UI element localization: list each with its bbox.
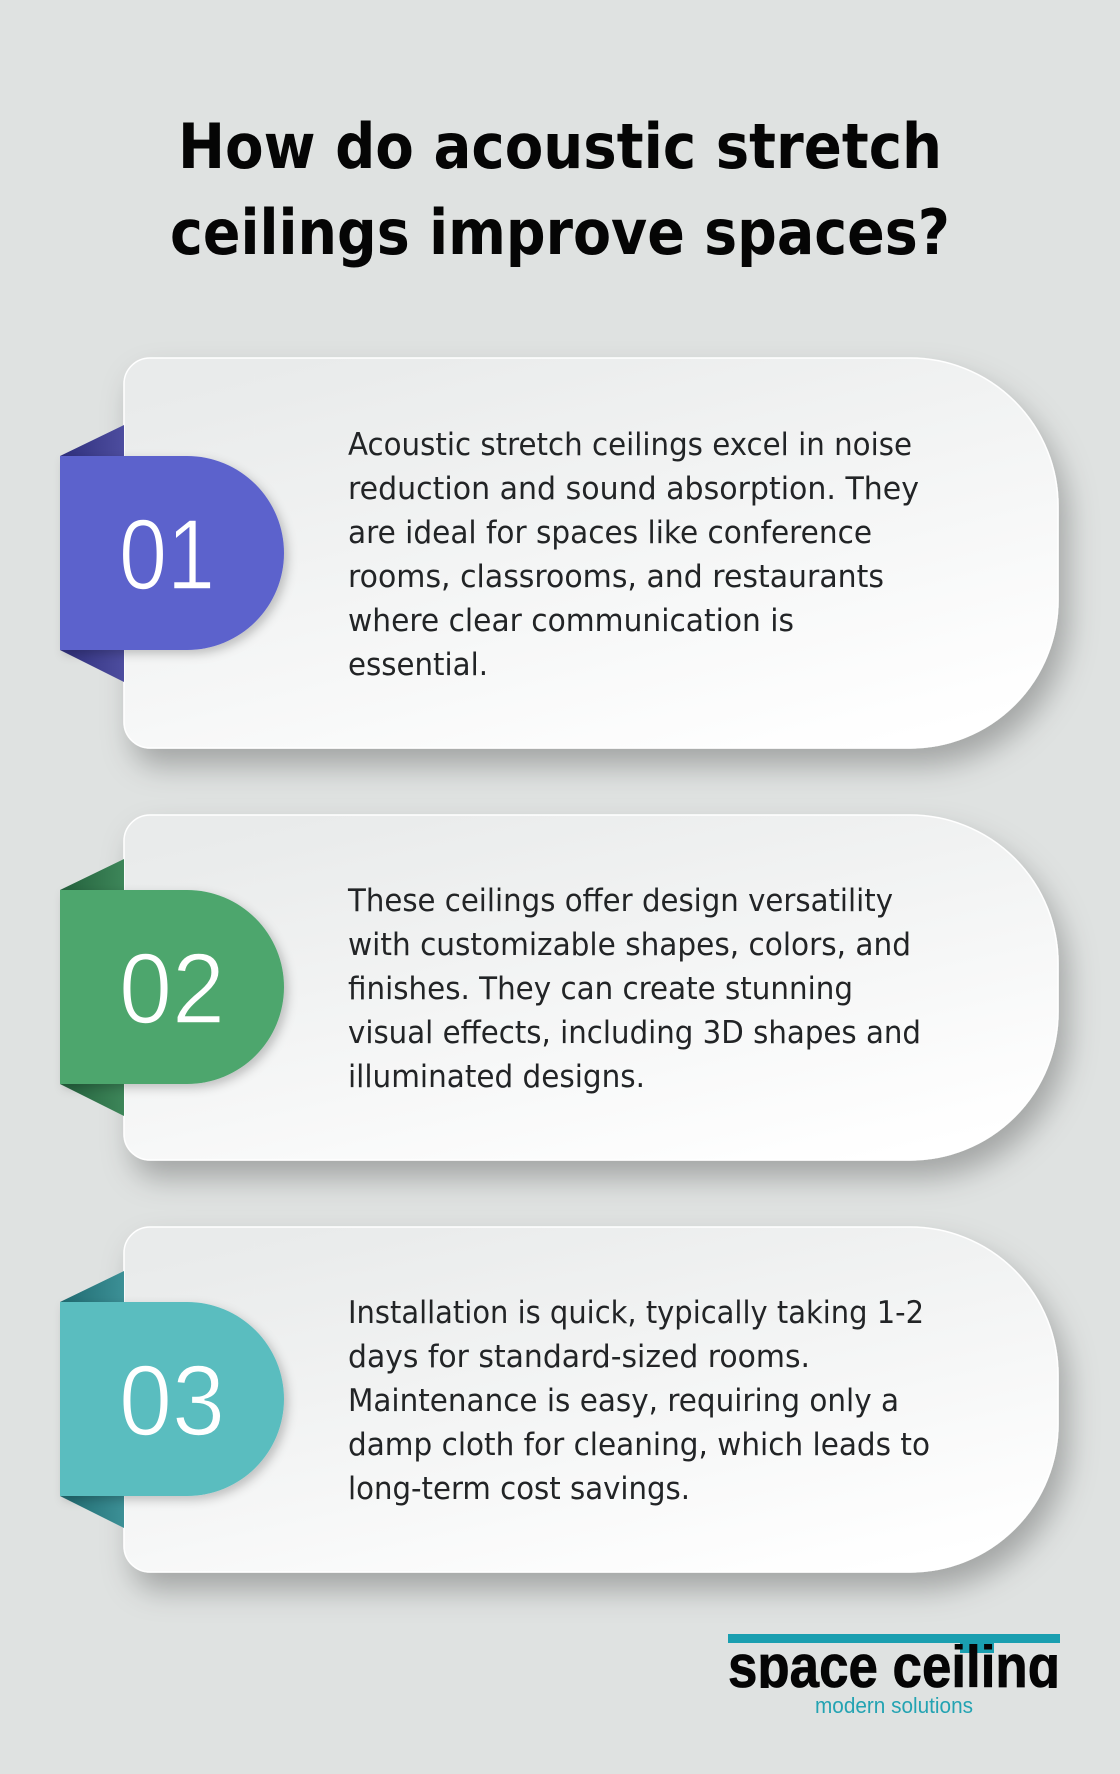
panel: step 03 — [60, 1227, 1058, 1572]
ribbon folds 02 — [60, 859, 124, 1116]
text 03: Maintenance is easy, requiring only a — [348, 1383, 899, 1419]
title: How do acoustic stretch — [178, 110, 942, 183]
text 01: where clear communication is — [348, 603, 794, 639]
logo — [728, 1633, 1060, 1718]
text 02 — [347, 883, 921, 1095]
text 03 — [348, 1295, 930, 1507]
text 02: These ceilings offer design versatility — [347, 883, 893, 919]
title: ceilings improve spaces? — [170, 196, 950, 269]
panel: step 02 — [60, 815, 1058, 1160]
card 02 — [124, 815, 1058, 1160]
text 03: Installation is quick, typically taking 1-2 — [348, 1295, 924, 1331]
badge 03 — [60, 1302, 284, 1496]
text 02: illuminated designs. — [348, 1059, 645, 1095]
text 01: essential. — [348, 647, 488, 683]
card 01 — [124, 358, 1058, 748]
text 03: days for standard-sized rooms. — [348, 1339, 810, 1375]
ribbon folds 03 — [60, 1271, 124, 1528]
text 03: long-term cost savings. — [348, 1471, 690, 1507]
logo wordmark: space ceiling — [728, 1633, 1060, 1700]
number 02: 02 — [119, 933, 225, 1045]
logo bar — [728, 1634, 1060, 1653]
title — [170, 110, 950, 269]
panel: step 01 — [60, 358, 1058, 748]
text 01: Acoustic stretch ceilings excel in noise — [348, 427, 912, 463]
text 01: reduction and sound absorption. They — [348, 471, 919, 507]
badge 02 — [60, 890, 284, 1084]
text 02: visual effects, including 3D shapes and — [348, 1015, 921, 1051]
ribbon folds 01 — [60, 425, 124, 682]
text 02: with customizable shapes, colors, and — [348, 927, 911, 963]
number 01: 01 — [119, 499, 215, 611]
text 01: are ideal for spaces like conference — [348, 515, 872, 551]
logo tagline: modern solutions — [815, 1693, 973, 1718]
text 03: damp cloth for cleaning, which leads to — [348, 1427, 930, 1463]
badge 01 — [60, 456, 284, 650]
card 03 — [124, 1227, 1058, 1572]
number 03: 03 — [119, 1345, 225, 1457]
text 02: finishes. They can create stunning — [348, 971, 853, 1007]
text 01: rooms, classrooms, and restaurants — [348, 559, 884, 595]
text 01 — [348, 427, 919, 683]
